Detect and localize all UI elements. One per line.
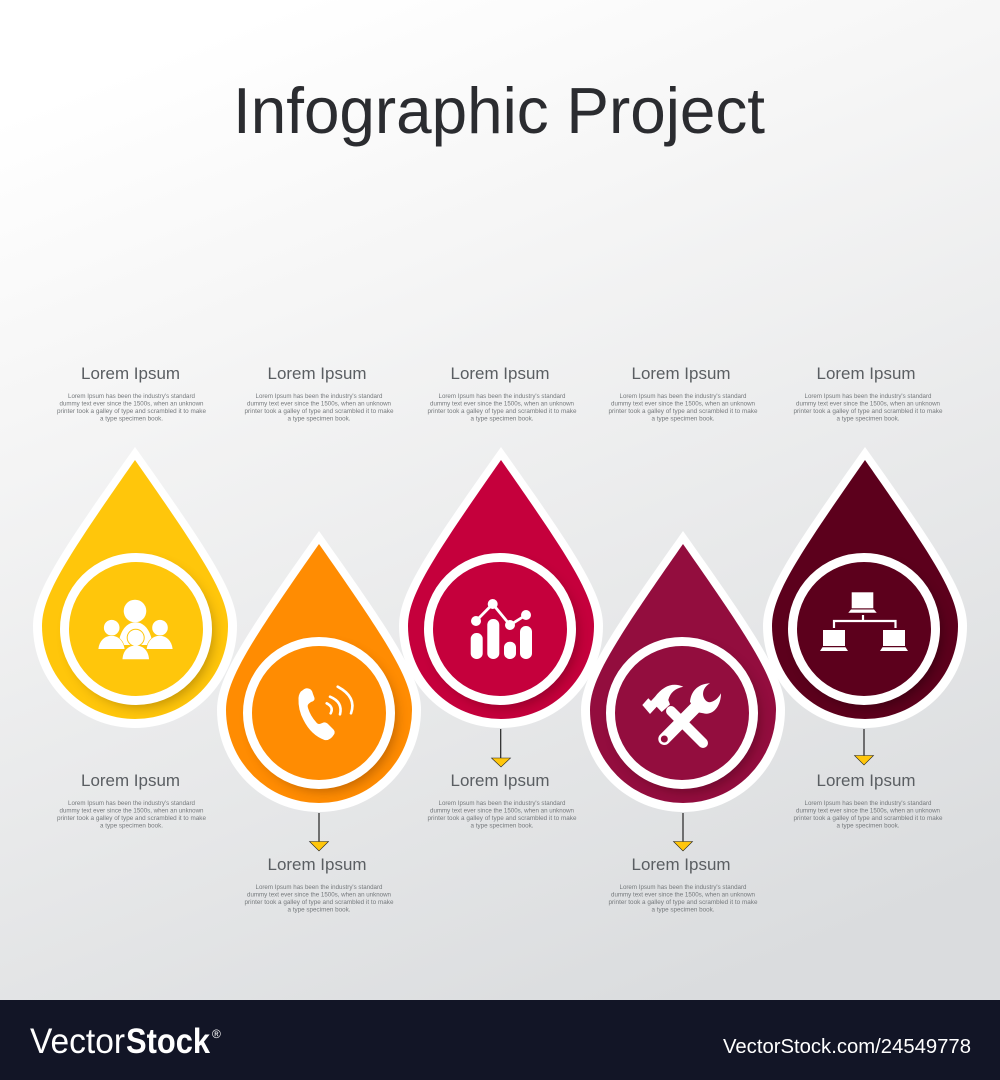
watermark footer band: Vector	[30, 1022, 125, 1061]
top text block 4: a type specimen book.	[652, 416, 715, 422]
top text block 5: printer took a galley of type and scrambled it to make	[794, 408, 943, 415]
top text block 1: Lorem Ipsum	[81, 365, 180, 383]
drop 1: yellow	[33, 447, 237, 728]
bottom text block 4: Lorem Ipsum	[632, 856, 730, 874]
bottom text block 4: printer took a galley of type and scrambled it to make	[608, 899, 758, 906]
bottom text block 1: printer took a galley of type and scrambled it to make	[57, 815, 206, 822]
bottom text block 4: Lorem Ipsum has been the industry's standard	[620, 884, 747, 891]
bottom text block 5	[794, 772, 943, 830]
top text block 1: dummy text ever since the 1500s, when an unknown	[60, 400, 204, 408]
bottom text block 1: dummy text ever since the 1500s, when an unknown	[60, 808, 204, 814]
top text block 2: printer took a galley of type and scrambled it to make	[244, 408, 394, 415]
bottom text block 4	[608, 856, 758, 914]
bottom text block 4: dummy text ever since the 1500s, when an unknown	[611, 892, 755, 898]
top text block 4	[608, 365, 758, 422]
top text block 3: printer took a galley of type and scrambled it to make	[428, 408, 577, 415]
top text block 5	[794, 365, 943, 422]
bottom text block 2: Lorem Ipsum has been the industry's standard	[256, 884, 383, 891]
top text block 1: a type specimen book.	[100, 416, 163, 422]
bottom text block 5: Lorem Ipsum	[817, 772, 915, 790]
drop 3: crimson	[399, 447, 603, 728]
top text block 1	[57, 365, 206, 422]
top text block 5: a type specimen book.	[836, 416, 900, 422]
top text block 1: printer took a galley of type and scrambled it to make	[57, 408, 206, 415]
bottom text block 2: Lorem Ipsum	[268, 856, 366, 874]
top text block 2: Lorem Ipsum has been the industry's standard	[256, 393, 383, 400]
top text block 5: Lorem Ipsum	[817, 365, 915, 383]
arrow 4	[674, 813, 692, 851]
top text block 2: Lorem Ipsum	[268, 365, 366, 383]
top text block 4: printer took a galley of type and scrambled it to make	[608, 408, 758, 415]
bottom text block 4: a type specimen book.	[652, 906, 715, 914]
bottom text block 5: printer took a galley of type and scrambled it to make	[794, 815, 943, 822]
top text block 5: Lorem Ipsum has been the industry's standard	[804, 393, 932, 400]
bottom text block 2: a type specimen book.	[288, 906, 351, 914]
arrow 3	[492, 729, 510, 767]
watermark footer band: Stock	[126, 1022, 210, 1061]
title: Infographic Project	[233, 74, 765, 147]
bottom text block 5: Lorem Ipsum has been the industry's standard	[804, 800, 932, 807]
top text block 4: dummy text ever since the 1500s, when an unknown	[611, 400, 755, 408]
bottom text block 1: Lorem Ipsum has been the industry's standard	[68, 800, 195, 807]
arrow 5	[854, 729, 874, 765]
icon: people group	[98, 600, 173, 659]
top text block 4: Lorem Ipsum	[632, 365, 730, 383]
bottom text block 3: Lorem Ipsum has been the industry's standard	[438, 800, 566, 807]
top text block 3: Lorem Ipsum	[451, 365, 549, 383]
bottom text block 5: dummy text ever since the 1500s, when an unknown	[796, 808, 940, 814]
icon: computer network	[820, 592, 908, 651]
top text block 2	[244, 365, 394, 422]
top text block 3: dummy text ever since the 1500s, when an unknown	[430, 400, 574, 408]
top text block 3: a type specimen book.	[470, 416, 534, 422]
bottom text block 3: dummy text ever since the 1500s, when an unknown	[430, 808, 574, 814]
bottom text block 2: printer took a galley of type and scrambled it to make	[244, 899, 394, 906]
top text block 3	[428, 365, 577, 422]
top text block 2: dummy text ever since the 1500s, when an unknown	[247, 400, 391, 408]
icon: bar and line chart	[471, 599, 532, 659]
watermark footer band	[0, 1000, 1000, 1080]
drop 2: orange	[217, 531, 421, 812]
arrow 2	[310, 813, 328, 851]
watermark footer band: VectorStock.com/24549778	[723, 1036, 971, 1058]
bottom text block 5: a type specimen book.	[836, 822, 900, 830]
bottom text block 2	[244, 856, 394, 914]
watermark footer band: ®	[212, 1027, 221, 1041]
top text block 4: Lorem Ipsum has been the industry's standard	[620, 393, 747, 400]
bottom text block 2: dummy text ever since the 1500s, when an unknown	[247, 892, 391, 898]
top text block 3: Lorem Ipsum has been the industry's standard	[438, 393, 566, 400]
bottom text block 1	[57, 772, 206, 830]
top text block 5: dummy text ever since the 1500s, when an unknown	[796, 400, 940, 408]
top text block 1: Lorem Ipsum has been the industry's standard	[68, 393, 195, 400]
bottom text block 1: Lorem Ipsum	[81, 772, 180, 790]
bottom text block 3	[428, 772, 577, 830]
drop 4: plum	[581, 531, 785, 812]
bottom text block 3: printer took a galley of type and scrambled it to make	[428, 815, 577, 822]
drop 5: dark maroon	[763, 447, 967, 728]
top text block 2: a type specimen book.	[288, 416, 351, 422]
icon: phone with signal	[298, 687, 352, 740]
bottom text block 3: a type specimen book.	[470, 822, 534, 830]
icon: hammer and wrench	[642, 683, 721, 743]
bottom text block 3: Lorem Ipsum	[451, 772, 549, 790]
bottom text block 1: a type specimen book.	[100, 822, 163, 830]
